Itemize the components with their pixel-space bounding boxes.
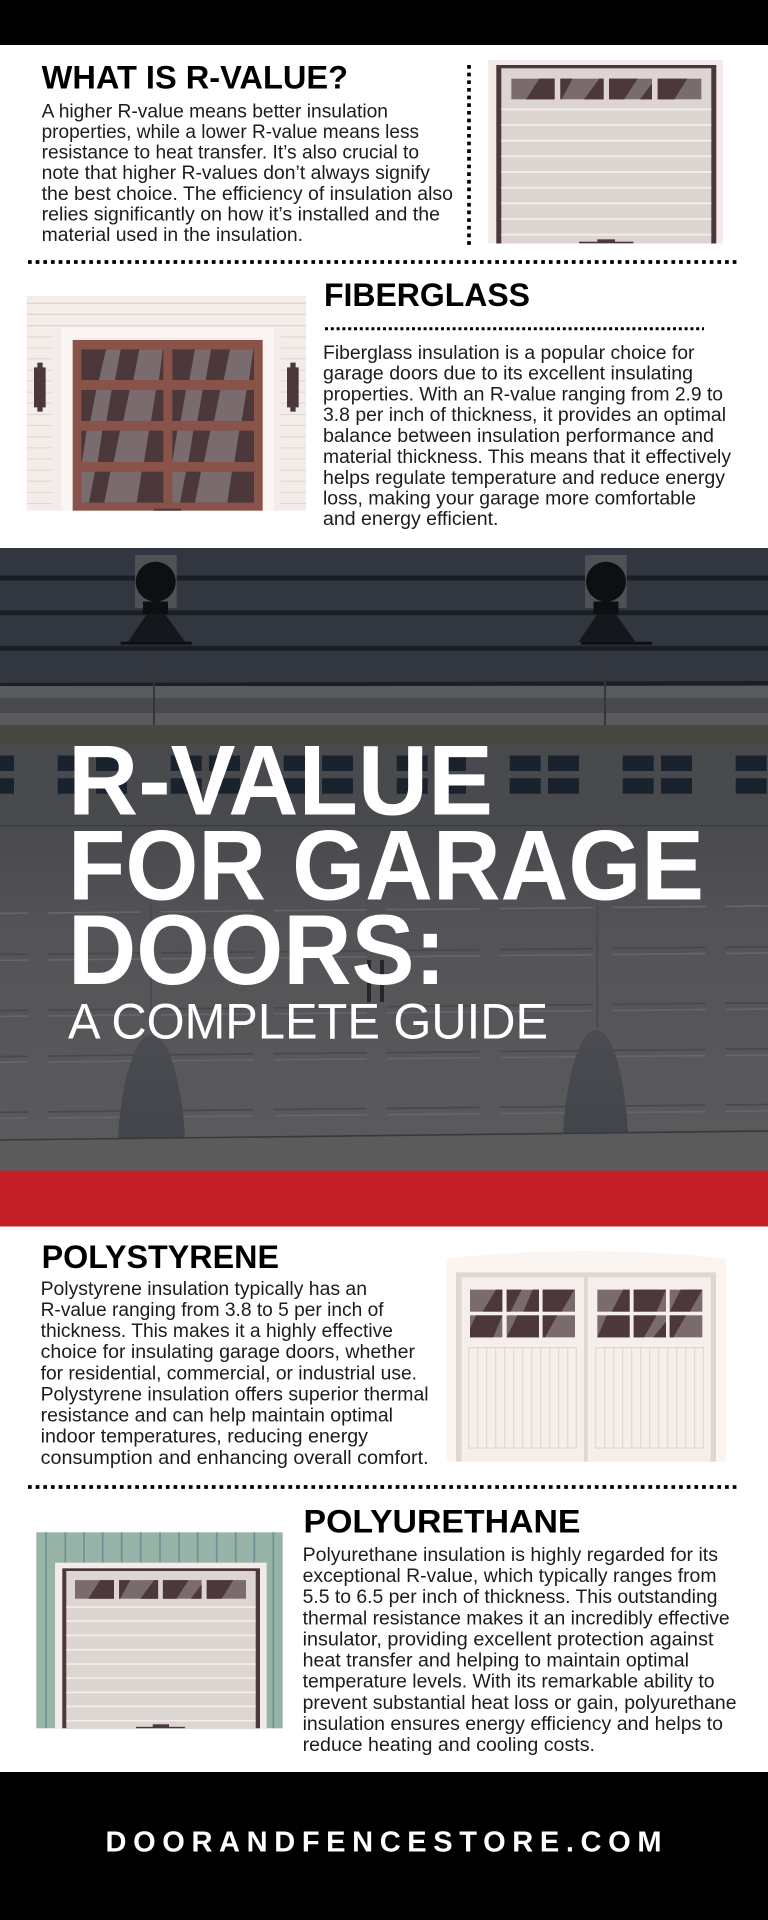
title: R-VALUE: [68, 724, 493, 836]
lamp left: [121, 555, 192, 645]
panel: polystyrene: [41, 1239, 726, 1469]
text block: what is R-value: the best choice. The efficiency of insulation also: [42, 184, 453, 205]
text block: what is R-value: material used in the insulation.: [42, 225, 303, 246]
icon: brown garage door with lanterns: [27, 296, 306, 511]
text block: polyurethane: Polyurethane insulation is highly regarded for its: [303, 1545, 718, 1566]
text block: polyurethane: heat transfer and helping to maintain optimal: [303, 1650, 689, 1671]
text block: fiberglass: 3.8 per inch of thickness, it provides an optimal: [323, 405, 726, 426]
icon: double carriage garage door: [447, 1251, 726, 1462]
photo: garage front: [0, 548, 768, 1171]
icon: garage door with top windows: [488, 60, 723, 244]
text block: polyurethane: insulation ensures energy efficiency and helps to: [303, 1714, 723, 1735]
heading: polystyrene: POLYSTYRENE: [42, 1239, 279, 1275]
icon: left lantern: [34, 363, 46, 412]
text block: what is R-value: relies significantly on how it’s installed and the: [42, 205, 440, 226]
panel: fiberglass: [27, 277, 732, 530]
lamp shadow right: [563, 1030, 628, 1134]
heading: polyurethane: POLYURETHANE: [304, 1504, 580, 1540]
text block: fiberglass: Fiberglass insulation is a popular choice for: [323, 343, 695, 364]
text block: what is R-value: resistance to heat transfer. It’s also crucial to: [42, 143, 419, 164]
text block: polystyrene: thickness. This makes it a highly effective: [41, 1321, 393, 1342]
text block: polyurethane: reduce heating and cooling costs.: [303, 1735, 595, 1756]
lamp shadow left: [118, 1035, 185, 1139]
text block: what is R-value: properties, while a lower R-value means less: [42, 122, 419, 143]
title: FOR GARAGE: [68, 809, 704, 920]
title: DOORS:: [68, 894, 446, 1005]
text block: fiberglass: properties. With an R-value ranging from 2.9 to: [323, 384, 723, 405]
text block: polystyrene: resistance and can help maintain optimal: [41, 1406, 393, 1427]
text block: fiberglass: helps regulate temperature and reduce energy: [323, 468, 726, 489]
icon: green wall garage door: [36, 1532, 283, 1728]
lamp right: [578, 555, 652, 645]
text block: polystyrene: indoor temperatures, reducing energy: [41, 1427, 369, 1448]
text block: polystyrene: choice for insulating garage doors, whether: [41, 1342, 416, 1363]
text block: what is R-value: note that higher R-values don’t always signify: [42, 163, 431, 184]
text block: what is R-value: [42, 102, 453, 246]
footer website text: DOORANDFENCESTORE.COM: [106, 1827, 662, 1859]
text block: polystyrene: Polystyrene insulation typically has an: [41, 1279, 367, 1300]
footer band: [0, 1772, 768, 1920]
text block: polystyrene: for residential, commercial, or industrial use.: [41, 1363, 417, 1384]
text block: fiberglass: garage doors due to its excellent insulating: [323, 364, 693, 385]
heading: fiberglass: FIBERGLASS: [324, 277, 530, 313]
panel: hero photo with title: [0, 548, 768, 1171]
text block: polystyrene: Polystyrene insulation offers superior thermal: [41, 1384, 429, 1405]
text block: fiberglass: and energy efficient.: [323, 509, 498, 530]
icon: right lantern: [287, 363, 299, 412]
door handle: [367, 960, 384, 1002]
subtitle: A COMPLETE GUIDE: [68, 994, 548, 1050]
text block: polystyrene: consumption and enhancing overall comfort.: [41, 1448, 429, 1469]
text block: polystyrene: [41, 1279, 429, 1469]
door panel seams: [0, 826, 768, 1119]
text block: fiberglass: material thickness. This means that it effectively: [323, 447, 732, 468]
text block: polyurethane: temperature levels. With its remarkable ability to: [303, 1671, 714, 1692]
text block: fiberglass: balance between insulation performance and: [323, 426, 714, 447]
text block: what is R-value: A higher R-value means better insulation: [42, 102, 388, 122]
text block: fiberglass: loss, making your garage more comfortable: [323, 488, 696, 509]
heading: what is R-value: WHAT IS R-VALUE?: [42, 60, 348, 96]
text block: polyurethane: insulator, providing excellent protection against: [303, 1629, 714, 1650]
text block: fiberglass: [323, 343, 732, 530]
panel: polyurethane: [36, 1504, 737, 1756]
text block: polystyrene: R-value ranging from 3.8 to 5 per inch of: [41, 1300, 384, 1321]
top black band: [0, 0, 768, 45]
text block: polyurethane: [303, 1545, 736, 1756]
red band: [0, 1170, 768, 1226]
text block: polyurethane: thermal resistance makes it an incredibly effective: [303, 1608, 730, 1629]
text block: polyurethane: exceptional R-value, which typically ranges from: [303, 1566, 716, 1587]
panel: what is R-value: [42, 60, 723, 246]
title: [68, 724, 704, 1050]
text block: polyurethane: prevent substantial heat loss or gain, polyurethane: [303, 1693, 736, 1714]
text block: polyurethane: 5.5 to 6.5 per inch of thickness. This outstanding: [303, 1587, 718, 1608]
